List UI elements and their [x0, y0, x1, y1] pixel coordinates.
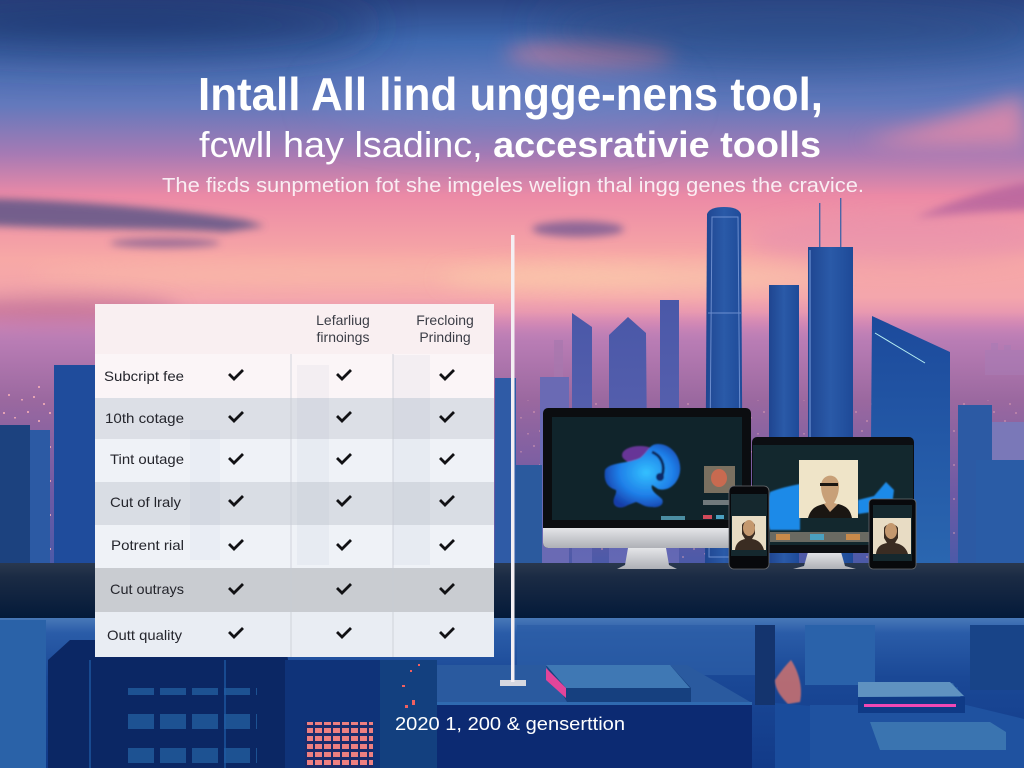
column headers: Lefarliug [316, 312, 370, 328]
right building [775, 682, 1024, 768]
row labels: Cut outrays [110, 581, 184, 597]
ledge band [0, 563, 1024, 618]
checkmarks [230, 371, 453, 637]
background: distant skyline [0, 312, 1024, 567]
row labels: Subcript fee [104, 368, 184, 384]
panel: comparison table [95, 304, 494, 657]
background: twilight sky [0, 0, 1024, 350]
device: smartphone [729, 486, 769, 569]
device: tablet [869, 499, 916, 569]
subtitle: The fiɛds sunpmetion fot she imgeles welign thal ingg genes the cravice. [162, 175, 864, 197]
row labels: Tint outage [110, 451, 184, 467]
city lights [775, 660, 801, 704]
background: foreground towers [0, 198, 1024, 563]
row labels: 10th cotage [105, 410, 184, 426]
left building [48, 640, 288, 768]
row labels: Outt quality [107, 627, 182, 643]
title line two: fcwll hay lsadinc, accesrativie toolls [199, 124, 821, 165]
column headers [316, 312, 474, 345]
device: laptop display [752, 437, 914, 569]
mid tower with pink windows [285, 660, 380, 768]
title: Intall All lind ungge-nens tool, [198, 68, 823, 120]
lower city [0, 618, 1024, 768]
column headers: Frecloing [416, 312, 474, 328]
central building [437, 665, 752, 768]
icon: blue 3D shape [605, 444, 680, 508]
row labels: Cut of lraly [110, 494, 181, 510]
device: desktop monitor [543, 408, 751, 569]
vertical divider line [511, 235, 514, 682]
row labels [104, 368, 184, 643]
footer text: 2020 1, 200 & genserttion [395, 714, 625, 734]
column headers: firnoings [317, 329, 369, 345]
row labels: Potrent rial [111, 537, 184, 553]
title [198, 68, 823, 165]
column headers: Prinding [419, 329, 471, 345]
